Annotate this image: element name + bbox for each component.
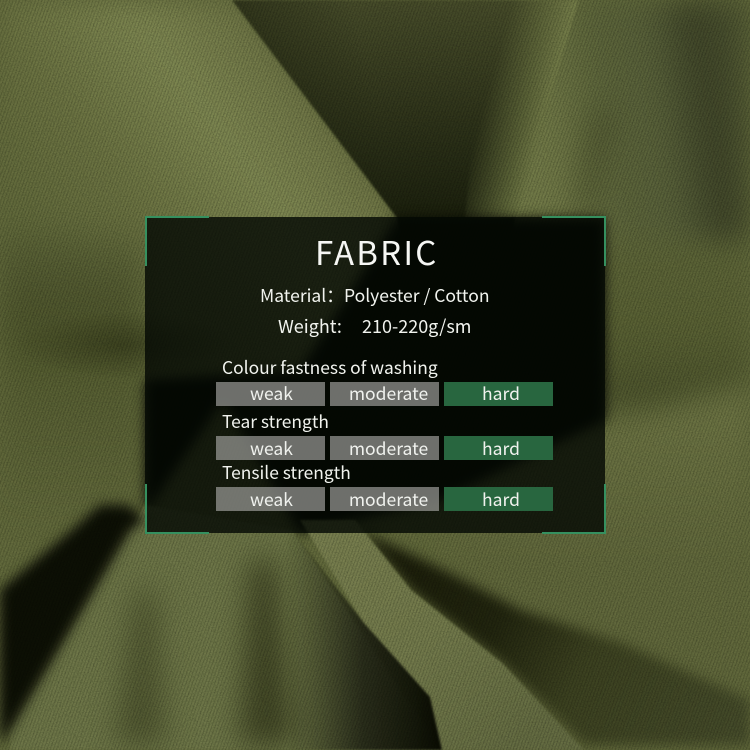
label: tear strength: Tear strength xyxy=(222,409,329,434)
corner: bottom right xyxy=(542,484,606,534)
rating row: colour fastness: moderate xyxy=(349,381,428,406)
info panel xyxy=(145,217,605,533)
material line: Material： xyxy=(260,283,344,308)
rating row: colour fastness xyxy=(216,381,553,406)
weight line: 210-220g/sm xyxy=(362,313,471,339)
rating row: tensile strength: hard xyxy=(482,487,520,512)
material line: Polyester / Cotton xyxy=(344,283,490,308)
title: FABRIC xyxy=(315,227,438,275)
corner: top right xyxy=(542,216,606,266)
material line xyxy=(260,283,490,308)
weight line: Weight: xyxy=(278,313,342,339)
rating row: tear strength: hard xyxy=(482,436,520,461)
rating row: tensile strength xyxy=(216,487,553,512)
rating row: tear strength xyxy=(216,436,553,461)
rating row: tensile strength: moderate xyxy=(349,487,428,512)
rating row: tear strength: weak xyxy=(250,436,293,461)
label: colour fastness: Colour fastness of washing xyxy=(222,355,438,380)
rating row: tensile strength: weak xyxy=(250,487,293,512)
rating row: colour fastness: weak xyxy=(250,381,293,406)
rating row: tear strength: moderate xyxy=(349,436,428,461)
corner brackets xyxy=(145,216,606,534)
corner: bottom left xyxy=(145,484,209,534)
weight line xyxy=(278,313,471,339)
corner: top left xyxy=(145,216,209,266)
rating row: colour fastness: hard xyxy=(482,381,520,406)
label: tensile strength: Tensile strength xyxy=(222,460,351,485)
